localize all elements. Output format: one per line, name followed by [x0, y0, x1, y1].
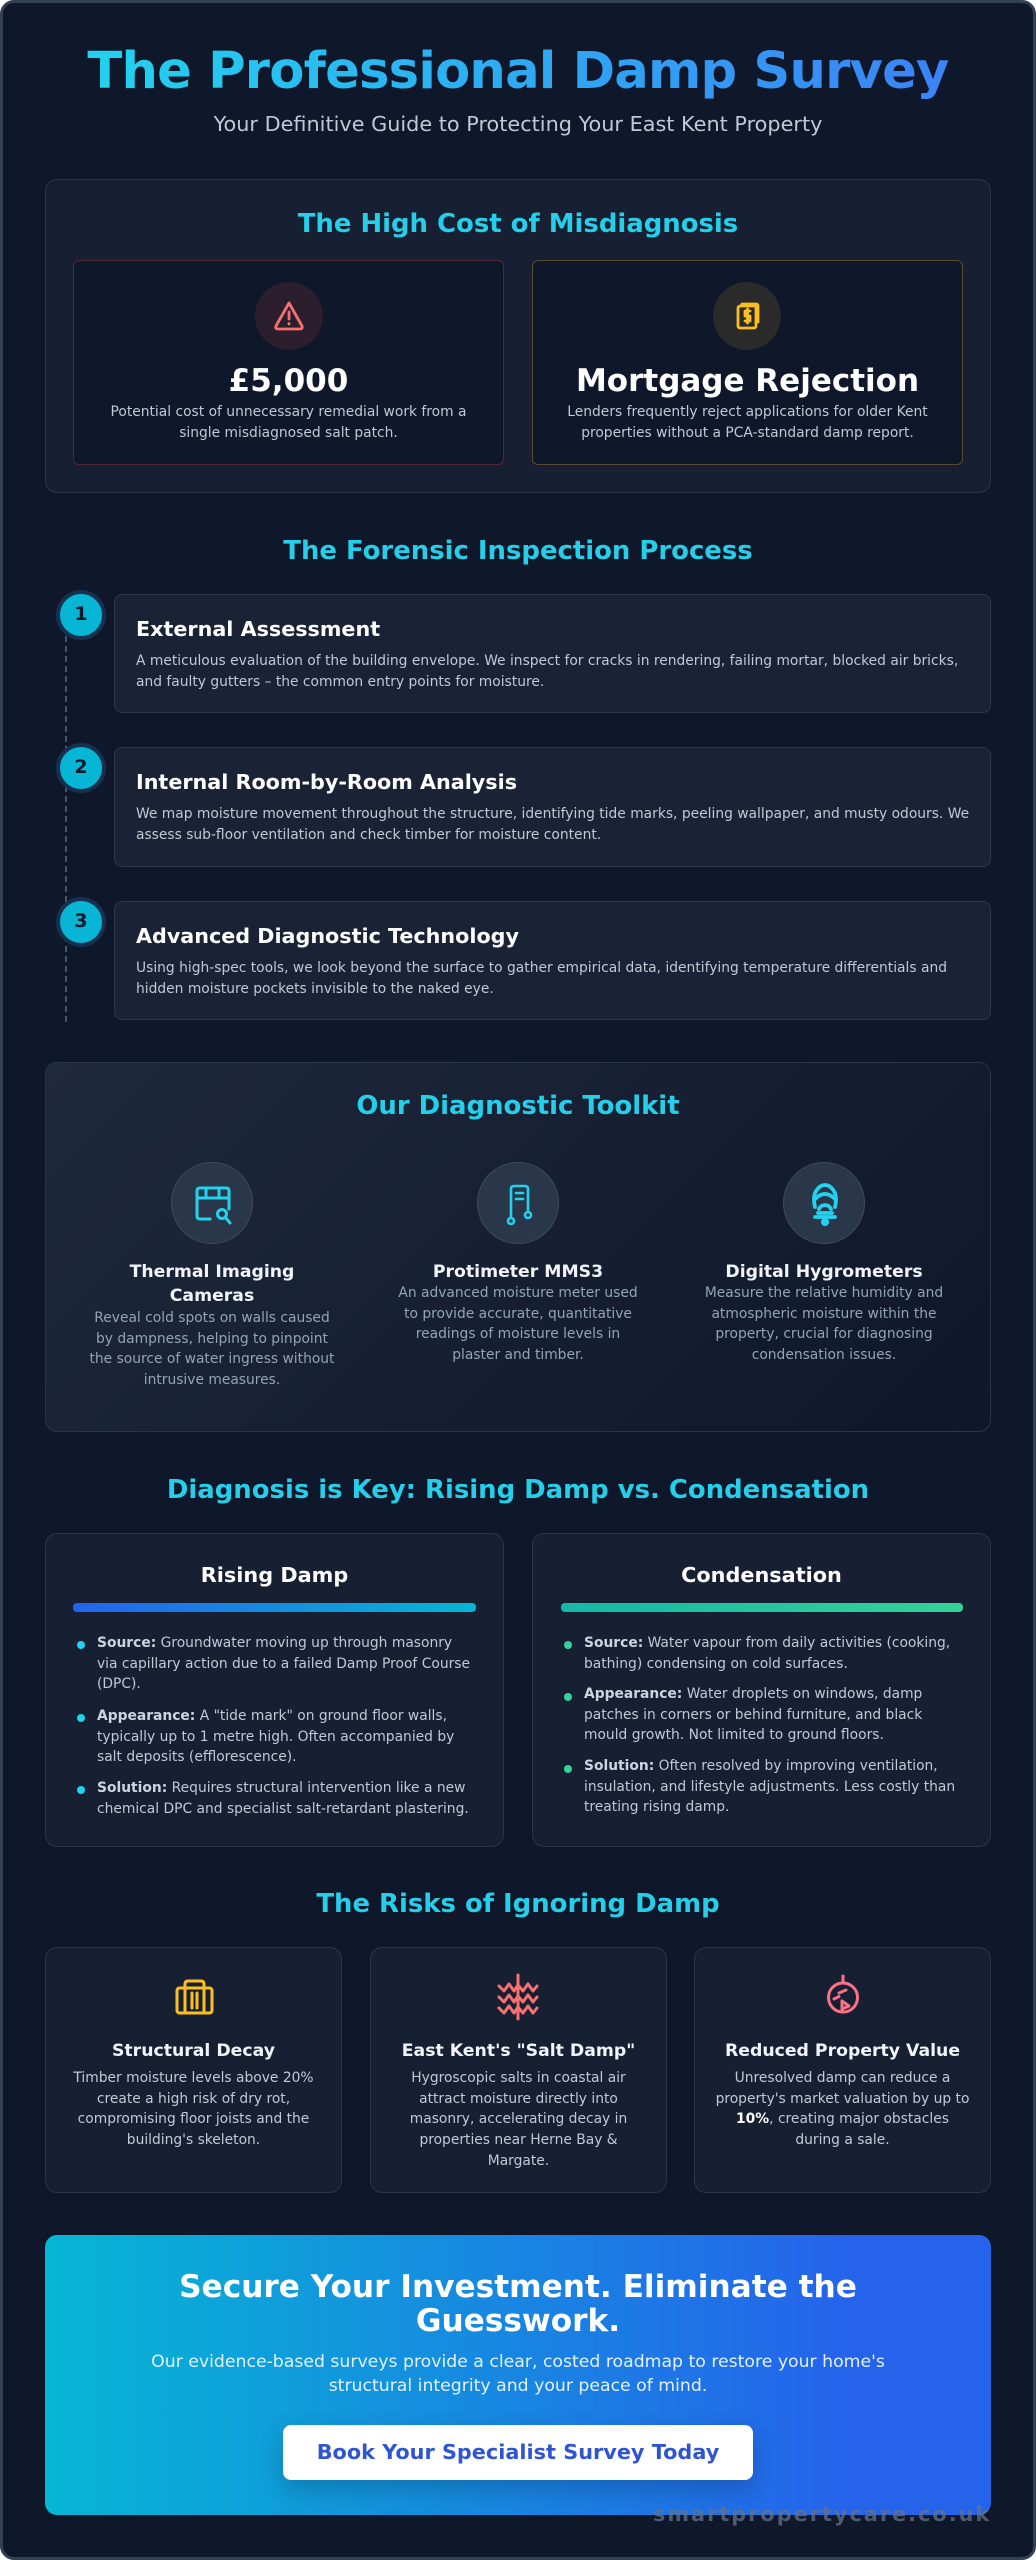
step card: assess sub-floor ventilation and check timber for moisture content. — [136, 827, 601, 843]
tool title — [130, 1262, 294, 1306]
appearance: Appearance: A "tide mark" on ground floor walls, — [97, 1708, 447, 1724]
source: bathing) condensing on cold surfaces. — [584, 1656, 848, 1672]
heading: forensic inspection: The Forensic Inspection Process — [283, 536, 753, 566]
title: The Professional Damp Survey — [87, 41, 949, 101]
source: Source: Groundwater moving up through masonry — [97, 1635, 452, 1651]
step card: External Assessment — [136, 617, 380, 641]
stat: £5,000 — [229, 363, 348, 399]
source — [564, 1635, 950, 1672]
tool description — [398, 1285, 638, 1363]
icon: hygrometer — [783, 1162, 865, 1244]
icon: banknote — [713, 282, 781, 350]
icon: warning triangle — [255, 282, 323, 350]
description: 10%, creating major obstacles — [736, 2111, 949, 2127]
cta button: Book Your Specialist Survey Today — [317, 2440, 719, 2464]
panel: diagnostic toolkit — [45, 1062, 991, 1432]
step card: hidden moisture pockets invisible to the naked eye. — [136, 981, 494, 997]
description: Lenders frequently reject applications for older Kent — [567, 404, 928, 420]
heading: risks: The Risks of Ignoring Damp — [316, 1889, 720, 1919]
watermark: smartpropertycare.co.uk — [653, 2502, 991, 2526]
card: mortgage rejection — [532, 260, 963, 465]
card heading: Rising Damp — [201, 1563, 348, 1587]
tool description: intrusive measures. — [144, 1372, 280, 1388]
icon: thermal camera — [171, 1162, 253, 1244]
description: attract moisture directly into — [419, 2091, 618, 2107]
number badge — [56, 897, 106, 947]
tool title: Digital Hygrometers — [725, 1262, 923, 1282]
tool description: atmospheric moisture within the — [711, 1306, 937, 1322]
step card: and faulty gutters – the common entry points for moisture. — [136, 674, 544, 690]
panel: rising damp — [45, 1533, 504, 1847]
tool description — [90, 1310, 334, 1388]
description: Margate. — [488, 2153, 549, 2169]
description: Potential cost of unnecessary remedial work from a — [111, 404, 466, 420]
description: Timber moisture levels above 20% — [73, 2070, 314, 2086]
gradient bar — [561, 1603, 963, 1612]
step 2 — [56, 743, 991, 867]
description: compromising floor joists and the — [78, 2111, 309, 2127]
description: Hygroscopic salts in coastal air — [411, 2070, 626, 2086]
source — [77, 1635, 470, 1692]
description — [73, 2070, 314, 2148]
cta text: structural integrity and your peace of mind. — [329, 2376, 707, 2396]
tool description — [705, 1285, 943, 1363]
number badge — [56, 590, 106, 640]
number badge: 3 — [74, 910, 88, 932]
step card — [114, 594, 991, 713]
heading: high cost: The High Cost of Misdiagnosis — [298, 209, 738, 239]
description: single misdiagnosed salt patch. — [179, 425, 398, 441]
heading: diagnosis is key: Diagnosis is Key: Rising Damp vs. Condensation — [167, 1475, 869, 1505]
step card — [114, 747, 991, 867]
source: Source: Water vapour from daily activities (cooking, — [584, 1635, 950, 1651]
panel: property value — [694, 1947, 991, 2193]
description: masonry, accelerating decay in — [410, 2111, 627, 2127]
step 3 — [56, 897, 991, 1020]
source: (DPC). — [97, 1676, 141, 1692]
step card: Advanced Diagnostic Technology — [136, 924, 519, 948]
source: via capillary action due to a failed Damp Proof Course — [97, 1656, 470, 1672]
tool: hygrometer — [705, 1162, 943, 1363]
description — [111, 404, 466, 441]
step card — [114, 901, 991, 1020]
description: properties without a PCA-standard damp report. — [581, 425, 914, 441]
appearance: Appearance: Water droplets on windows, damp — [584, 1686, 922, 1702]
step card: We map moisture movement throughout the structure, identifying tide marks, peeling wallpaper, and musty odours. We — [136, 806, 969, 822]
cta heading — [179, 2269, 857, 2339]
card heading: Condensation — [681, 1563, 842, 1587]
panel: structural decay — [45, 1947, 342, 2193]
gradient bar — [73, 1603, 476, 1612]
solution: chemical DPC and specialist salt-retardant plastering. — [97, 1801, 469, 1817]
appearance — [77, 1708, 454, 1765]
heading: toolkit: Our Diagnostic Toolkit — [356, 1091, 680, 1121]
icon: moisture meter — [477, 1162, 559, 1244]
subtitle: Your Definitive Guide to Protecting Your East Kent Property — [214, 112, 822, 136]
stat: Mortgage Rejection — [576, 363, 919, 399]
number badge: 2 — [74, 756, 88, 778]
panel: condensation — [532, 1533, 991, 1847]
icon: salt damp — [497, 1974, 539, 2020]
appearance: patches in corners or behind furniture, and black — [584, 1707, 922, 1723]
solution: Solution: Often resolved by improving ventilation, — [584, 1758, 938, 1774]
description: during a sale. — [795, 2132, 890, 2148]
call to action — [45, 2235, 991, 2515]
tool description: readings of moisture levels in — [416, 1326, 620, 1342]
appearance: mould growth. Not limited to ground floors. — [584, 1727, 884, 1743]
description: Unresolved damp can reduce a — [735, 2070, 950, 2086]
description — [567, 404, 928, 441]
cta heading: Secure Your Investment. Eliminate the — [179, 2269, 857, 2305]
description: properties near Herne Bay & — [419, 2132, 618, 2148]
icon: property value — [827, 1974, 859, 2014]
cta heading: Guesswork. — [416, 2303, 620, 2339]
step card: Internal Room-by-Room Analysis — [136, 770, 517, 794]
tool description: An advanced moisture meter used — [398, 1285, 638, 1301]
description: property's market valuation by up to — [716, 2091, 969, 2107]
cta text: Our evidence-based surveys provide a clear, costed roadmap to restore your home's — [151, 2352, 885, 2372]
tool description: by dampness, helping to pinpoint — [96, 1331, 328, 1347]
title: East Kent's "Salt Damp" — [402, 2041, 635, 2061]
tool description: property, crucial for diagnosing — [715, 1326, 933, 1342]
tool title: Cameras — [170, 1286, 254, 1306]
solution: insulation, and lifestyle adjustments. Less costly than — [584, 1779, 955, 1795]
appearance: typically up to 1 metre high. Often accompanied by — [97, 1729, 454, 1745]
tool: thermal imaging — [90, 1162, 334, 1388]
tool description: condensation issues. — [752, 1347, 896, 1363]
title: Structural Decay — [112, 2041, 275, 2061]
number badge — [56, 743, 106, 793]
tool description: Reveal cold spots on walls caused — [94, 1310, 330, 1326]
tool title: Thermal Imaging — [130, 1262, 294, 1282]
bullet list — [77, 1635, 470, 1817]
tool description: Measure the relative humidity and — [705, 1285, 943, 1301]
card: £5,000 — [73, 260, 504, 465]
cta text — [151, 2352, 885, 2396]
tool description: to provide accurate, quantitative — [404, 1306, 632, 1322]
solution: Solution: Requires structural intervention like a new — [97, 1780, 465, 1796]
tool description: plaster and timber. — [452, 1347, 584, 1363]
step 1 — [56, 590, 991, 713]
title: Reduced Property Value — [725, 2041, 960, 2061]
appearance — [564, 1686, 922, 1743]
appearance: salt deposits (efflorescence). — [97, 1749, 297, 1765]
cta button — [283, 2425, 753, 2480]
description: building's skeleton. — [127, 2132, 260, 2148]
bullet list — [564, 1635, 955, 1815]
solution: treating rising damp. — [584, 1799, 729, 1815]
tool title: Protimeter MMS3 — [433, 1262, 603, 1282]
panel: high cost of misdiagnosis — [45, 179, 991, 493]
description: create a high risk of dry rot, — [97, 2091, 290, 2107]
step card: A meticulous evaluation of the building envelope. We inspect for cracks in rendering, failing mortar, blocked air bricks, — [136, 653, 958, 669]
timeline: inspection steps — [65, 636, 67, 1022]
icon: structural decay — [176, 1980, 214, 2014]
step card: Using high-spec tools, we look beyond the surface to gather empirical data, identifying temperature differentials and — [136, 960, 947, 976]
solution — [564, 1758, 955, 1815]
number badge: 1 — [74, 603, 88, 625]
tool description: the source of water ingress without — [90, 1351, 334, 1367]
solution — [77, 1780, 469, 1817]
description — [410, 2070, 627, 2169]
header — [87, 41, 949, 136]
description — [716, 2070, 969, 2148]
panel: salt damp — [370, 1947, 667, 2193]
tool: protimeter — [398, 1162, 638, 1363]
